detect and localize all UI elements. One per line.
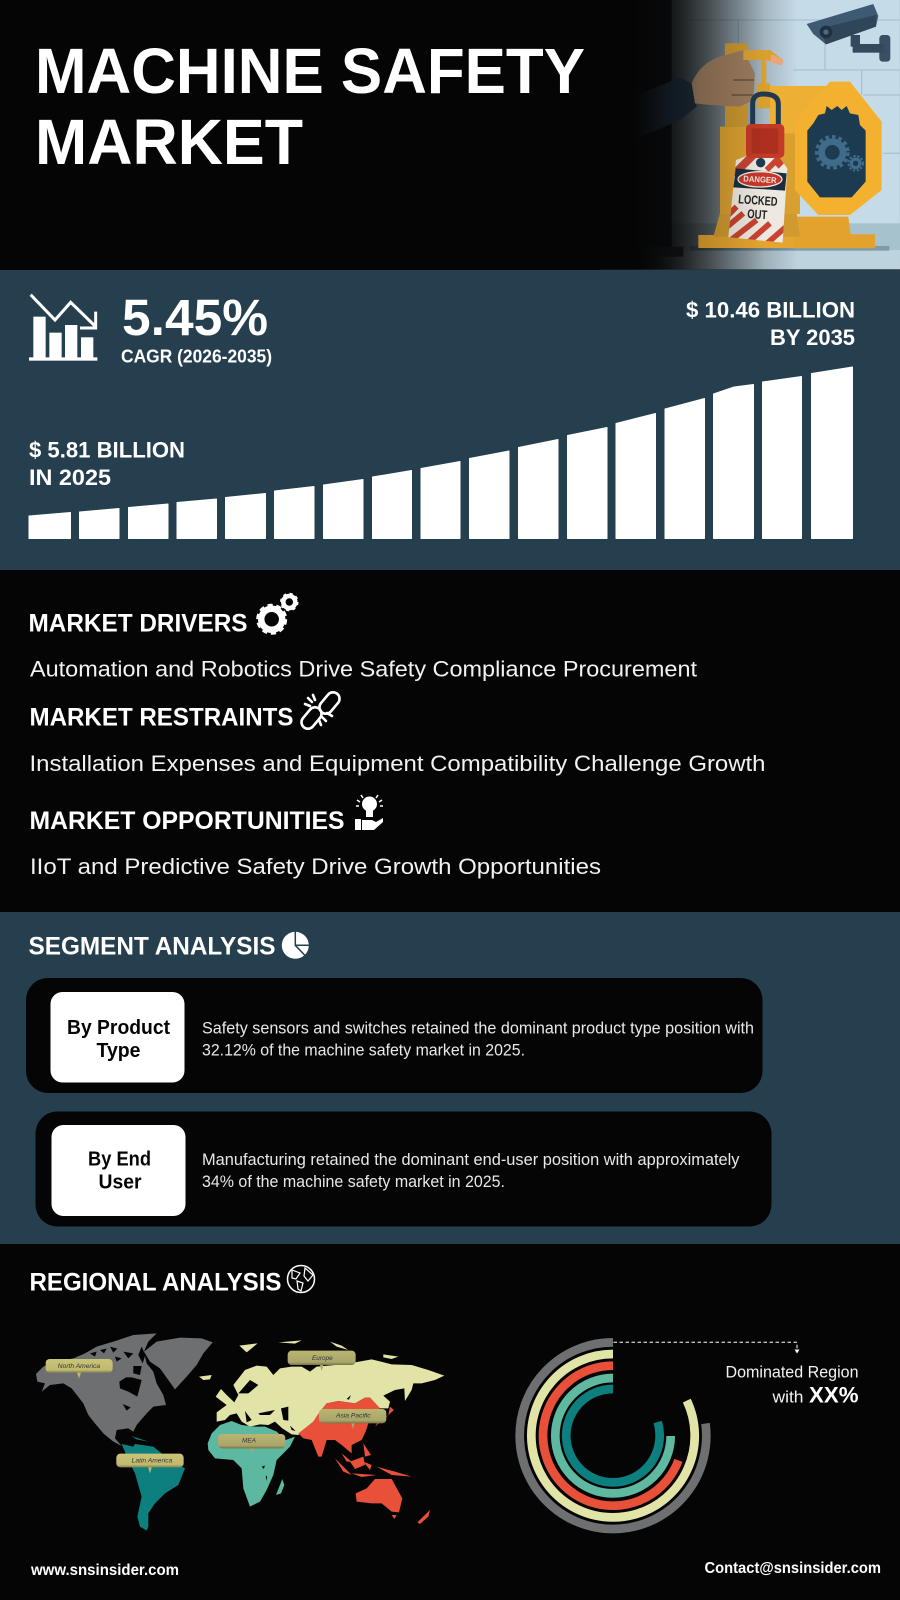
heading: regional analysis: REGIONAL ANALYSIS	[30, 1268, 282, 1296]
region: Old World	[199, 1340, 444, 1524]
callout: North America: North America	[58, 1363, 100, 1370]
text: dominated region	[726, 1364, 858, 1408]
icon: chart with trend arrow	[29, 295, 97, 361]
icon: gears	[258, 594, 297, 633]
world map	[36, 1333, 444, 1531]
heading: market drivers: MARKET DRIVERS	[28, 610, 248, 638]
text: dominated region: with	[771, 1388, 804, 1406]
callout: MEA: MEA	[242, 1438, 257, 1445]
label box: by end user	[52, 1125, 186, 1216]
callout: Latin America: Latin America	[132, 1458, 173, 1465]
icon: broken chain link	[299, 690, 342, 731]
callout: Europe: Europe	[312, 1355, 333, 1362]
icon: padlock and danger tag: OUT	[747, 207, 768, 222]
icon: padlock and danger tag	[728, 92, 788, 243]
text: product type detail: 32.12% of the machine safety market in 2025.	[202, 1042, 525, 1060]
title: MACHINE SAFETY	[35, 35, 585, 107]
callout: Europe	[288, 1351, 356, 1371]
CAGR value: 5.45%	[122, 289, 268, 346]
heading: market restraints	[30, 690, 342, 732]
icon: camera	[807, 4, 890, 62]
card: by product type	[26, 978, 762, 1093]
heading: market opportunities: MARKET OPPORTUNITIES	[30, 807, 344, 835]
region: Americas	[36, 1333, 213, 1531]
region: Latin America	[122, 1436, 185, 1531]
radial bar chart	[520, 1342, 706, 1529]
text: end user detail: 34% of the machine safety market in 2025.	[202, 1173, 505, 1191]
label box: by product type	[50, 992, 184, 1082]
label box: by product type: By Product	[67, 1017, 170, 1039]
label: 2035 value: BY 2035	[770, 325, 855, 350]
label: 2025 value: IN 2025	[29, 465, 111, 490]
icon: padlock and danger tag: DANGER	[743, 173, 777, 185]
icon: bulb in hand	[355, 795, 383, 830]
panel: header illustration	[600, 0, 900, 269]
footer: website: www.snsinsider.com	[30, 1562, 179, 1579]
label: 2025 value: $ 5.81 BILLION	[29, 438, 185, 462]
callout: Asia Pacific	[319, 1409, 386, 1429]
region: Middle East and Africa	[208, 1421, 295, 1507]
text: product type detail: Safety sensors and switches retained the dominant product type position with	[202, 1020, 754, 1038]
text: product type detail	[202, 1020, 754, 1060]
heading: market restraints: MARKET RESTRAINTS	[30, 704, 294, 732]
panel: market size	[0, 270, 900, 570]
card: by end user	[36, 1112, 772, 1226]
callout: Latin America	[116, 1454, 184, 1473]
text: market opportunities detail: IIoT and Predictive Safety Drive Growth Opportunities	[30, 854, 601, 879]
label: 2035 value: $ 10.46 BILLION	[686, 298, 855, 322]
callout line with arrow	[614, 1342, 800, 1354]
title: MARKET	[35, 106, 303, 178]
title	[35, 35, 585, 178]
text: dominated region: Dominated Region	[726, 1364, 858, 1382]
heading: market drivers	[28, 594, 297, 638]
heading: segment analysis: SEGMENT ANALYSIS	[28, 932, 276, 960]
bar chart	[29, 367, 852, 538]
callout: North America	[46, 1359, 113, 1379]
region: Asia Pacific	[298, 1398, 430, 1524]
icon: machine with gears	[698, 43, 882, 248]
text: dominated region: XX%	[809, 1382, 858, 1408]
label: 2025 value	[29, 438, 185, 490]
CAGR label: CAGR (2026-2035)	[121, 346, 272, 366]
text: end user detail: Manufacturing retained the dominant end-user position with approximately	[202, 1151, 740, 1169]
icon: pie chart	[282, 931, 310, 959]
text: market drivers detail: Automation and Robotics Drive Safety Compliance Procurement	[30, 656, 697, 682]
label: 2035 value	[686, 298, 855, 350]
text: market restraints detail: Installation Expenses and Equipment Compatibility Challenge Growth	[30, 751, 766, 776]
icon: globe	[288, 1266, 314, 1292]
icon: sleeve and hand on lever	[633, 0, 783, 257]
text: end user detail	[202, 1151, 740, 1191]
label box: by end user: User	[98, 1172, 142, 1194]
panel: segment analysis	[0, 912, 900, 1244]
region: North America	[36, 1333, 213, 1446]
footer: contact: Contact@snsinsider.com	[704, 1560, 881, 1577]
heading: market opportunities	[30, 795, 383, 835]
label box: by end user: By End	[88, 1148, 151, 1170]
callout: Asia Pacific: Asia Pacific	[335, 1413, 371, 1420]
callout: MEA	[218, 1434, 285, 1454]
region: Europe and Russia	[199, 1340, 444, 1435]
icon: padlock and danger tag: LOCKED	[738, 192, 778, 209]
label box: by product type: Type	[96, 1040, 140, 1062]
